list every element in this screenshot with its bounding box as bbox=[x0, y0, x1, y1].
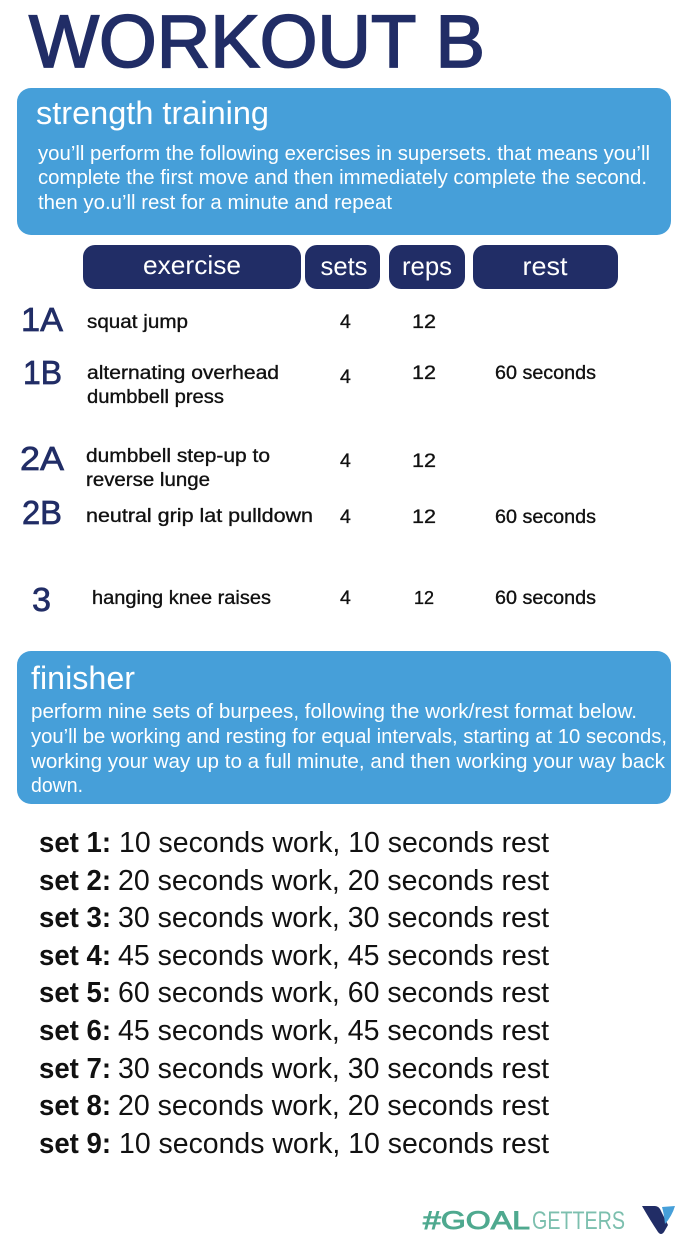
panel text: strength training description: you’ll perform the following exercises in supersets. that means you’ll bbox=[38, 143, 650, 165]
panel text: strength training description: then yo.u’ll rest for a minute and repeat bbox=[38, 192, 392, 214]
burpee set list: set 3: bbox=[39, 902, 111, 934]
exercise table bbox=[20, 301, 596, 618]
row 2A: dumbbell step-up to bbox=[86, 445, 270, 467]
burpee set list: 30 seconds work, 30 seconds rest bbox=[118, 1053, 549, 1085]
row 2B: 12 bbox=[412, 506, 436, 528]
burpee set list: 10 seconds work, 10 seconds rest bbox=[119, 827, 549, 859]
burpee set list: set 8: bbox=[39, 1090, 111, 1122]
burpee set list: 20 seconds work, 20 seconds rest bbox=[118, 1090, 549, 1122]
burpee set list: 30 seconds work, 30 seconds rest bbox=[118, 902, 549, 934]
burpee set list: set 6: bbox=[39, 1015, 111, 1047]
table header bbox=[83, 245, 618, 289]
icon: V logo bbox=[642, 1206, 675, 1234]
row 2B: 2B bbox=[22, 494, 62, 531]
row 2A: 12 bbox=[412, 450, 436, 472]
row 1A: 4 bbox=[340, 311, 351, 333]
row 1B: 4 bbox=[340, 366, 351, 388]
burpee set list: set 2: bbox=[39, 865, 111, 897]
burpee set list: set 4: bbox=[39, 940, 111, 972]
row 3 bbox=[32, 581, 596, 618]
panel text: finisher description: down. bbox=[31, 775, 83, 797]
row 2B: 60 seconds bbox=[495, 506, 596, 528]
burpee set list: 60 seconds work, 60 seconds rest bbox=[118, 977, 549, 1009]
row 2A: 2A bbox=[20, 440, 64, 477]
row 1B bbox=[23, 354, 596, 408]
row 1B: 12 bbox=[412, 362, 436, 384]
burpee set list: set 1: bbox=[39, 827, 111, 859]
row 1A: squat jump bbox=[87, 311, 188, 333]
burpee set list: 45 seconds work, 45 seconds rest bbox=[118, 1015, 549, 1047]
panel text: finisher description: you’ll be working and resting for equal intervals, starting at 10 seconds, bbox=[31, 726, 667, 748]
hashtag: #GOALGETTERS: GETTERS bbox=[532, 1207, 625, 1235]
row 2A bbox=[20, 440, 436, 491]
hashtag: #GOALGETTERS bbox=[423, 1207, 625, 1235]
panel text: strength training description: complete the first move and then immediately complete the second. bbox=[38, 167, 647, 189]
burpee set list: set 5: bbox=[39, 977, 111, 1009]
panel heading: finisher: finisher bbox=[31, 660, 135, 696]
row 3: 12 bbox=[414, 588, 434, 608]
hashtag: #GOALGETTERS: #GOAL bbox=[423, 1207, 530, 1235]
panel text: finisher description: working your way up to a full minute, and then working your way back bbox=[30, 751, 666, 773]
table header: reps bbox=[402, 251, 452, 281]
title: WORKOUT B bbox=[29, 0, 485, 83]
row 2B: 4 bbox=[340, 506, 351, 528]
row 3: 4 bbox=[340, 587, 351, 609]
burpee set list: 20 seconds work, 20 seconds rest bbox=[118, 865, 549, 897]
row 1B: alternating overhead bbox=[87, 362, 279, 384]
row 1B: dumbbell press bbox=[87, 386, 224, 408]
table header: exercise bbox=[143, 250, 241, 280]
burpee set list bbox=[39, 827, 549, 1160]
burpee set list: 45 seconds work, 45 seconds rest bbox=[118, 940, 549, 972]
row 2B: neutral grip lat pulldown bbox=[86, 505, 313, 527]
row 2A: 4 bbox=[340, 450, 351, 472]
panel: finisher bbox=[17, 651, 671, 804]
panel heading: strength training: strength training bbox=[36, 95, 269, 131]
row 3: 3 bbox=[32, 581, 51, 618]
panel text: finisher description: perform nine sets of burpees, following the work/rest format below. bbox=[31, 701, 637, 723]
burpee set list: set 7: bbox=[39, 1053, 111, 1085]
row 1A bbox=[21, 301, 436, 338]
row 3: hanging knee raises bbox=[92, 587, 271, 609]
table header: sets bbox=[320, 251, 368, 281]
panel: strength training bbox=[17, 88, 671, 235]
row 2B bbox=[22, 494, 596, 531]
panel text: strength training description bbox=[38, 143, 650, 214]
burpee set list: set 9: bbox=[39, 1128, 111, 1160]
row 3: 60 seconds bbox=[495, 587, 596, 609]
row 1B: 1B bbox=[23, 354, 62, 391]
row 1B: 60 seconds bbox=[495, 362, 596, 384]
row 2A: reverse lunge bbox=[86, 469, 210, 491]
table header: rest bbox=[522, 251, 568, 281]
row 1A: 1A bbox=[21, 301, 63, 338]
row 1A: 12 bbox=[412, 311, 436, 333]
burpee set list: 10 seconds work, 10 seconds rest bbox=[119, 1128, 549, 1160]
panel text: finisher description bbox=[30, 701, 667, 797]
